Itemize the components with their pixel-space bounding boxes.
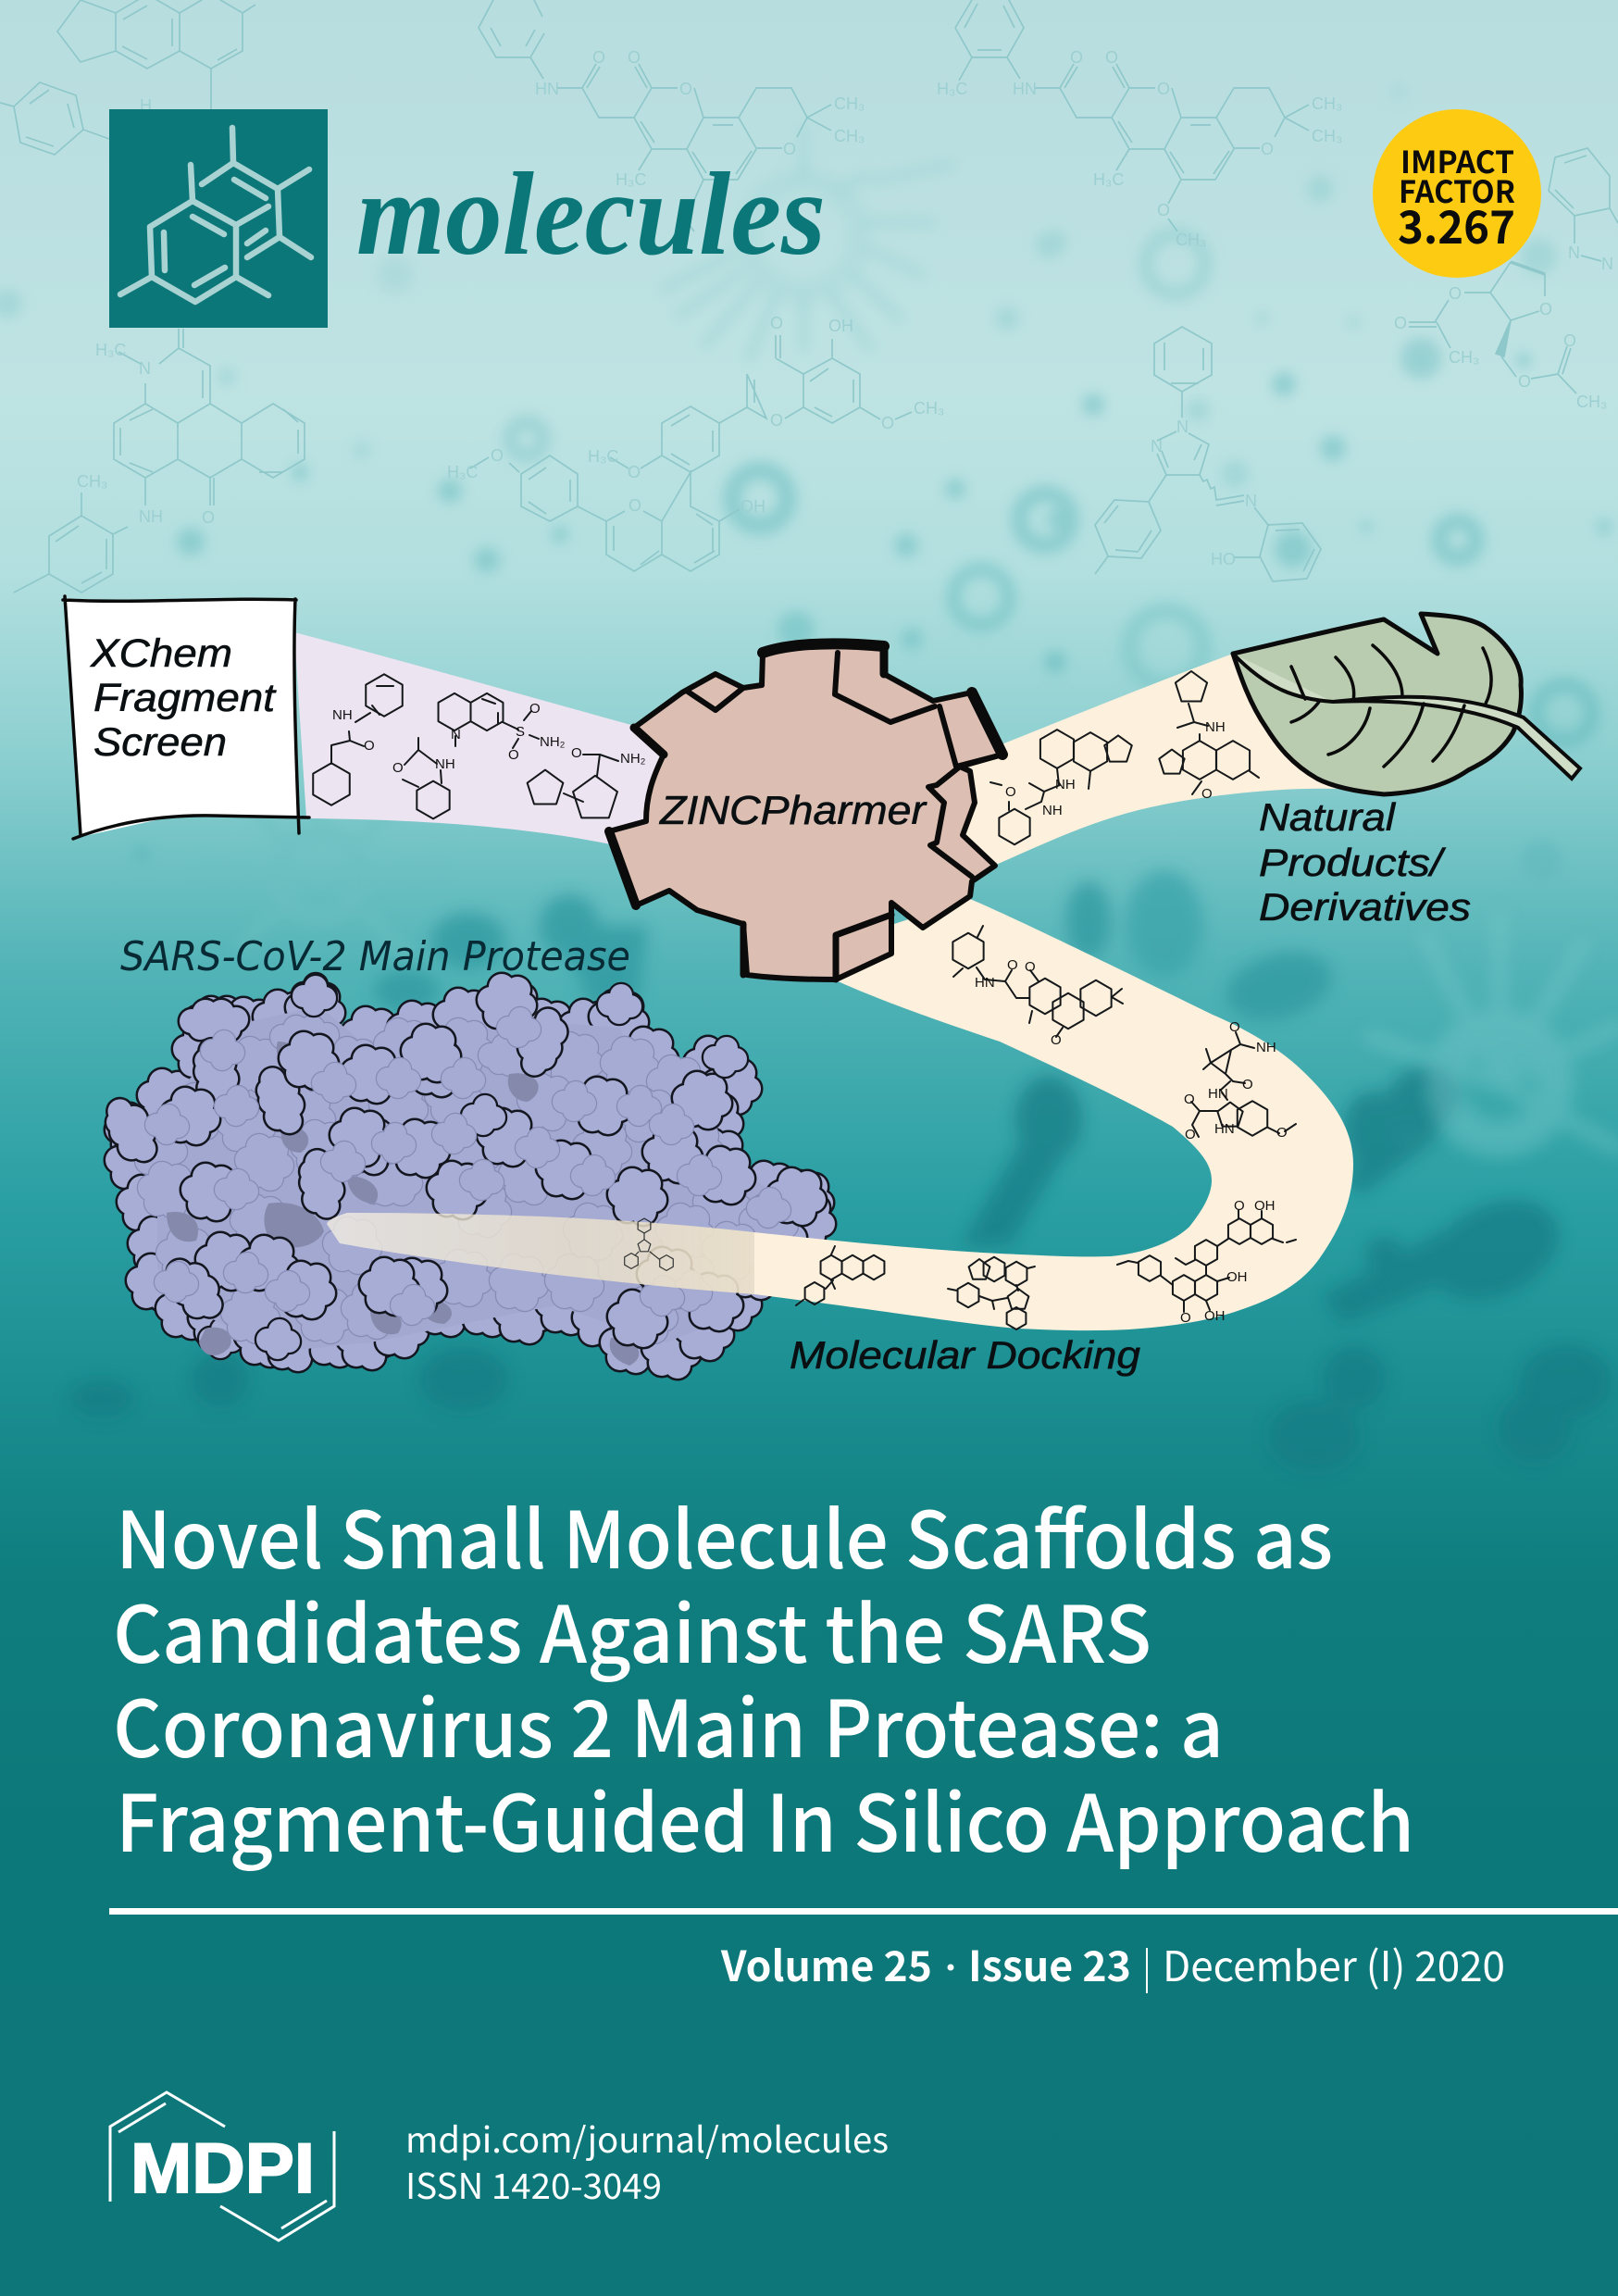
background: faint molecule line drawings: O	[1070, 48, 1083, 67]
label: natural products: Natural	[1259, 795, 1397, 839]
protein outlined atoms	[96, 974, 826, 1359]
logo molecule icon	[120, 128, 311, 302]
XChem fragment screen box	[63, 596, 309, 839]
box label: Fragment	[93, 676, 277, 720]
background: faint molecule line drawings: O	[202, 508, 215, 527]
background: faint molecule line drawings	[0, 0, 1618, 593]
ribbon: natural products to leaf: NH	[1042, 803, 1063, 818]
label: molecular docking: Molecular Docking	[790, 1333, 1140, 1377]
background: faint molecule line drawings: O	[628, 48, 641, 67]
ribbon: natural products to leaf	[953, 654, 1338, 880]
background: faint molecule line drawings: CH₃	[834, 94, 865, 113]
ribbon: molecular docking S-curve: OH	[1226, 1269, 1248, 1285]
molecule: coumarin top right	[955, 0, 1309, 231]
background: faint molecule line drawings: H₃C	[447, 463, 478, 481]
article title	[113, 1478, 1414, 1875]
molecule: fused rings top left	[0, 0, 255, 155]
journal address: ISSN 1420-3049	[405, 2158, 662, 2209]
ribbon: molecular docking S-curve: OH	[1204, 1308, 1226, 1324]
background: faint molecule line drawings: CH₃	[1312, 94, 1342, 113]
small virus spots	[0, 82, 1612, 862]
issue information: Issue 23	[968, 1933, 1131, 1993]
background: faint molecule line drawings: O	[1157, 201, 1170, 219]
leaf stem and veins	[1233, 645, 1580, 779]
ribbon: fragments to ZINCPharmer: S	[516, 724, 525, 740]
protein rim atoms	[106, 974, 835, 1379]
article title: Candidates Against the SARS	[113, 1572, 1151, 1686]
molecule: nucleoside far right	[1409, 148, 1618, 393]
background: faint molecule line drawings: H	[140, 96, 152, 115]
background: faint molecule line drawings: O	[1539, 300, 1552, 318]
background: faint molecule line drawings: CH₃	[1312, 127, 1342, 145]
article title: Coronavirus 2 Main Protease: a	[113, 1666, 1224, 1780]
MDPI logo	[110, 2092, 334, 2240]
ribbon tail over protein	[327, 1213, 754, 1294]
ribbon: molecular docking S-curve: O	[1229, 1019, 1240, 1035]
background: faint molecule line drawings: HN	[535, 80, 559, 98]
ribbon: natural products to leaf: NH	[1205, 719, 1226, 735]
ribbon: molecular docking S-curve: O	[1184, 1092, 1195, 1107]
background: faint molecule line drawings: CH₃	[834, 127, 865, 145]
docking molecules	[625, 926, 1296, 1329]
background: faint molecule line drawings: N	[1601, 255, 1613, 273]
natural product molecules	[990, 671, 1259, 844]
background: faint molecule line drawings: HN	[1013, 80, 1037, 98]
ribbon: fragments to ZINCPharmer: NH	[435, 756, 455, 772]
background: faint molecule line drawings: H₃C	[588, 447, 618, 466]
background: faint molecule line drawings: O	[881, 414, 894, 432]
label: natural products: Products/	[1259, 841, 1447, 884]
background: faint molecule line drawings: O	[1261, 140, 1274, 158]
ribbon: fragments to ZINCPharmer: O	[392, 760, 404, 776]
ribbon: molecular docking S-curve: O	[1185, 1127, 1196, 1142]
background: faint molecule line drawings: H₃C	[95, 341, 126, 359]
journal name: molecules	[356, 148, 826, 280]
ribbon: fragments to ZINCPharmer: NH₂	[540, 734, 566, 750]
background: faint molecule line drawings: O	[770, 411, 783, 430]
ribbon: molecular docking S-curve	[327, 899, 1353, 1330]
background: faint molecule line drawings: O	[592, 48, 605, 67]
background: faint molecule line drawings: O	[1105, 48, 1118, 67]
gear tooth edges	[609, 643, 1002, 980]
gear label: ZINCPharmer	[659, 788, 927, 833]
label: protein: SARS-CoV-2 Main Protease	[120, 933, 630, 980]
ribbon: fragments to ZINCPharmer: O	[508, 747, 519, 763]
badge text	[1398, 138, 1515, 257]
logo hexagon	[110, 2092, 334, 2240]
ribbon: molecular docking S-curve: NH	[1256, 1040, 1276, 1055]
background: faint molecule line drawings: N	[1176, 418, 1189, 436]
ribbon: molecular docking S-curve: HN	[1208, 1086, 1228, 1102]
badge text: FACTOR	[1399, 168, 1515, 212]
fragment molecules	[313, 674, 618, 818]
molecule: pyridine top	[479, 0, 831, 231]
box label	[90, 631, 277, 765]
logo square	[109, 109, 328, 328]
background: faint molecule line drawings: CH₃	[77, 472, 107, 491]
ribbon: molecular docking S-curve: O	[1007, 957, 1018, 973]
background: faint molecule line drawings: O	[629, 496, 641, 515]
ribbon: molecular docking S-curve: O	[1234, 1198, 1245, 1214]
gear body	[609, 645, 1002, 980]
issue information	[720, 1933, 1505, 1993]
background: faint molecule line drawings: O	[628, 463, 641, 481]
background: faint molecule line drawings: HO	[1211, 550, 1236, 568]
molecule: tetracyclic centre left	[14, 329, 305, 593]
ribbon: fragments to ZINCPharmer: NH	[332, 707, 353, 723]
ribbon: molecular docking S-curve: HN	[975, 975, 995, 991]
ribbon: fragments to ZINCPharmer	[294, 632, 685, 844]
ribbon: fragments to ZINCPharmer: NH₂	[620, 751, 646, 767]
gear: ZINCPharmer	[609, 643, 1002, 980]
ribbon: natural products to leaf: NH	[1055, 777, 1076, 792]
background: faint molecule line drawings: CH₃	[1449, 348, 1479, 367]
ribbon: fragments to ZINCPharmer: O	[529, 701, 541, 717]
background: blurred virus particles	[0, 82, 1618, 1471]
background: faint molecule line drawings: N	[1151, 437, 1163, 455]
virus: hazy light spikes right	[1370, 917, 1618, 1148]
background: faint molecule line drawings: O	[1563, 331, 1576, 350]
ribbon: fragments to ZINCPharmer: N	[451, 727, 461, 742]
label: natural products: Derivatives	[1259, 885, 1471, 929]
journal address	[405, 2112, 889, 2209]
protein soft atoms	[129, 1016, 798, 1343]
background: faint molecule line drawings: O	[491, 446, 504, 465]
ribbon: molecular docking S-curve: O	[1180, 1310, 1191, 1326]
background: faint molecule line drawings: O	[770, 314, 783, 332]
ribbon: molecular docking S-curve: O	[1276, 1125, 1288, 1141]
virus: lower left	[204, 768, 444, 954]
ribbon: fragments to ZINCPharmer: O	[571, 745, 582, 761]
box label: Screen	[93, 720, 227, 765]
protein overlapping atoms	[145, 1007, 790, 1325]
protein inner fill	[134, 1009, 796, 1352]
protein: SARS-CoV-2 main protease	[96, 974, 835, 1379]
ribbon: molecular docking S-curve: HN	[1214, 1121, 1235, 1137]
background: faint molecule line drawings: O	[1157, 80, 1170, 98]
virus: mid stalks	[374, 870, 1339, 1030]
background: faint molecule line drawings: NH	[139, 507, 163, 526]
background: faint molecule line drawings: O	[783, 140, 796, 158]
ribbon: molecular docking S-curve: O	[1242, 1077, 1253, 1092]
background: faint molecule line drawings: H₃C	[1093, 170, 1124, 189]
background: faint molecule line drawings: CH₃	[1176, 231, 1206, 249]
protein shadow pockets	[167, 1042, 639, 1366]
white rule	[109, 1908, 1618, 1915]
background: faint molecule line drawings: CH₃	[1576, 393, 1607, 411]
ribbon: molecular docking S-curve: O	[1051, 1032, 1062, 1048]
badge text: IMPACT	[1400, 138, 1514, 182]
journal address: mdpi.com/journal/molecules	[405, 2112, 889, 2163]
lower spots behind the artwork	[778, 569, 1592, 881]
issue information: December (I) 2020	[1163, 1933, 1505, 1993]
ribbon: molecular docking S-curve: O	[1025, 959, 1036, 975]
background: faint molecule line drawings: O	[679, 80, 692, 98]
background: faint molecule line drawings: N	[139, 359, 151, 378]
issue information: Volume 25	[720, 1933, 932, 1993]
molecule: pyrazole right	[1095, 327, 1321, 581]
logo wordmark: MDPI	[131, 2129, 315, 2208]
background: faint molecule line drawings: H₃C	[616, 170, 646, 189]
ribbon: molecular docking S-curve: OH	[1254, 1198, 1276, 1214]
background: faint molecule line drawings: OH	[741, 497, 765, 516]
box label: XChem	[90, 631, 232, 676]
ribbon: natural products to leaf: O	[1201, 786, 1213, 802]
background: faint molecule line drawings: O	[1394, 314, 1407, 332]
virus: top centre	[665, 130, 951, 358]
virus: dark stalks lower right	[69, 1053, 1612, 1471]
article title: Novel Small Molecule Scaffolds as	[116, 1478, 1333, 1591]
badge text: 3.267	[1398, 192, 1515, 257]
ribbon: fragments to ZINCPharmer: O	[364, 738, 375, 754]
impact factor badge	[1373, 109, 1541, 278]
background: faint molecule line drawings: H₃C	[937, 80, 967, 98]
leaf	[1233, 614, 1580, 794]
ribbon: natural products to leaf: O	[1005, 784, 1016, 800]
background: faint molecule line drawings: OH	[828, 317, 853, 335]
background: faint molecule line drawings: O	[1518, 372, 1531, 391]
molecule: flavone dimer centre	[470, 335, 912, 571]
label: natural products	[1259, 795, 1471, 929]
background: faint molecule line drawings: O	[1449, 284, 1462, 303]
article title: Fragment-Guided In Silico Approach	[116, 1761, 1414, 1875]
background: faint molecule line drawings: CH₃	[914, 399, 944, 418]
background: faint molecule line drawings: N	[1568, 243, 1580, 262]
background: faint molecule line drawings: N	[1245, 492, 1257, 510]
journal logo	[109, 109, 826, 328]
leaf blade	[1233, 614, 1521, 794]
